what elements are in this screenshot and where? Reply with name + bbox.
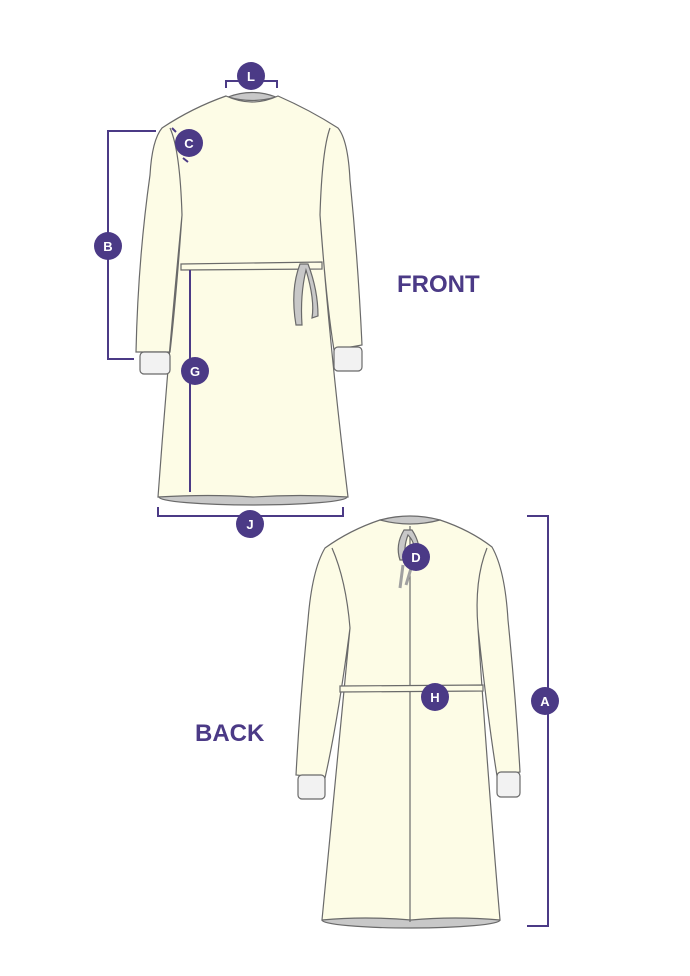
dimension B: B (103, 239, 113, 254)
dimension L (226, 62, 277, 90)
dimension D (402, 543, 430, 571)
back gown (296, 516, 520, 928)
front gown (136, 92, 362, 505)
dimension G: G (190, 364, 200, 379)
dimension J (158, 507, 343, 538)
dimension C: C (184, 136, 194, 151)
dimension A (527, 516, 559, 926)
dimension L: L (247, 69, 255, 84)
dimension C (172, 128, 203, 162)
dimension H (421, 683, 449, 711)
BACK label: BACK (195, 720, 265, 747)
dimension G (181, 270, 209, 492)
dimension J: J (246, 517, 254, 532)
dimension A: A (540, 694, 550, 709)
FRONT label: FRONT (397, 271, 480, 298)
dimension H: H (430, 690, 440, 705)
dimension D: D (411, 550, 421, 565)
dimension B (94, 131, 156, 359)
